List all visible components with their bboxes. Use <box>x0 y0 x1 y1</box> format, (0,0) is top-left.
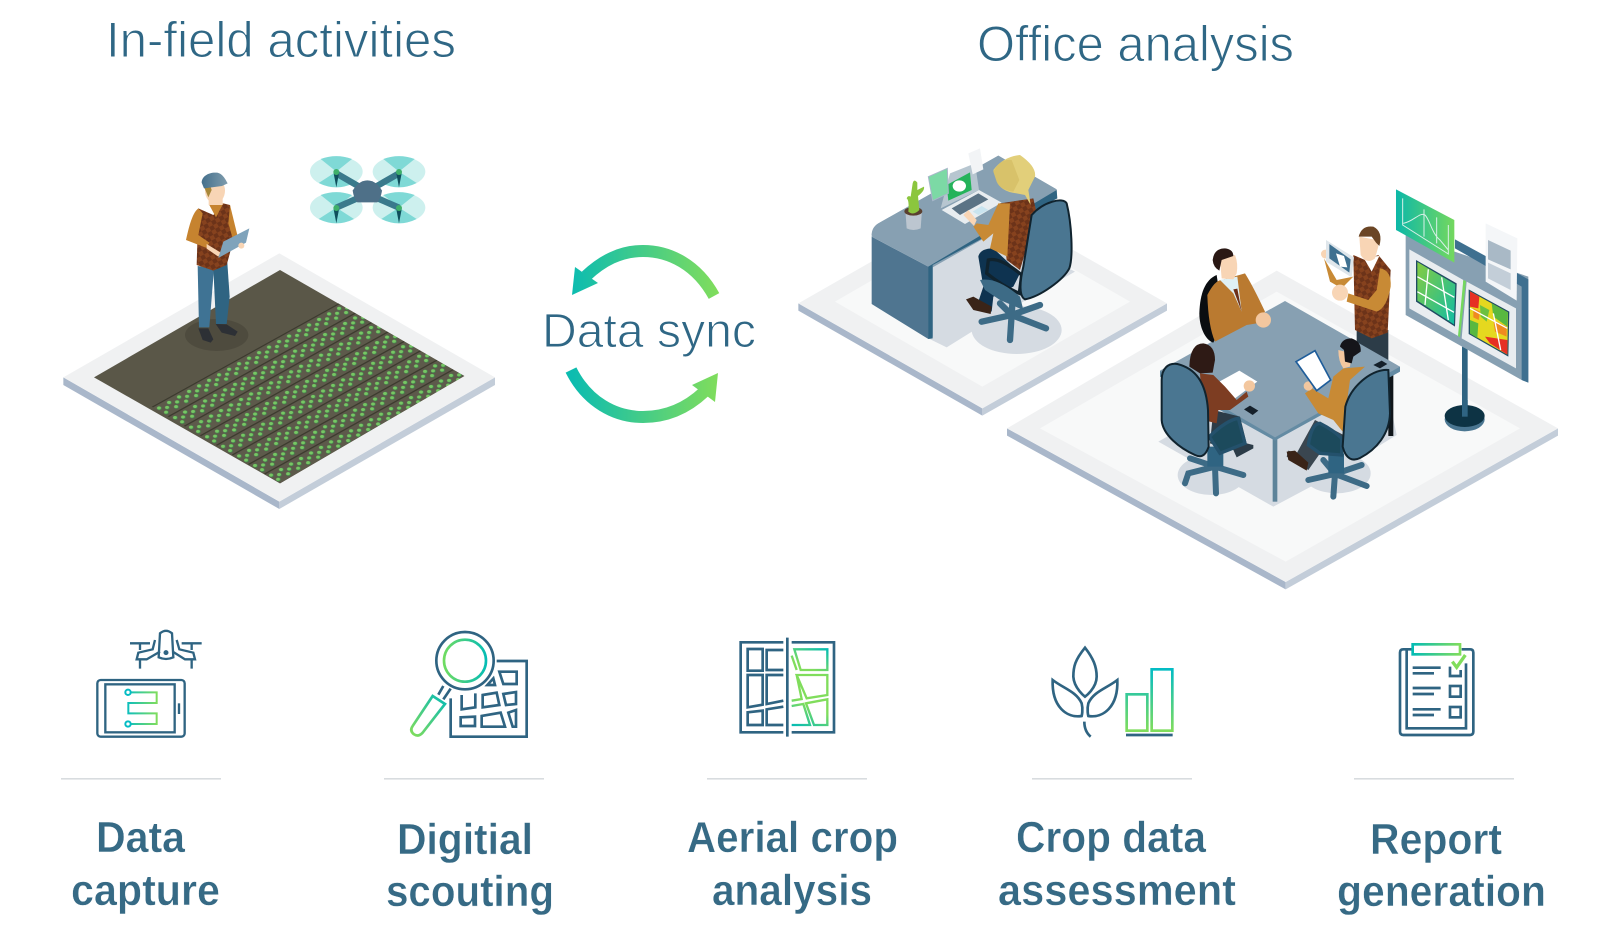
laptop with cloud sync <box>928 148 1002 224</box>
icon: report clipboard <box>1400 644 1473 735</box>
data sync arrows and label <box>542 251 756 417</box>
soil and crop rows <box>94 270 464 483</box>
divider and caption: Crop data assessment <box>998 778 1236 915</box>
bars <box>1126 669 1173 735</box>
quadcopter drone <box>310 156 425 223</box>
desk <box>872 156 1057 339</box>
standing presenter <box>1321 226 1393 436</box>
tablet flight path <box>125 690 157 727</box>
seated woman, left <box>1189 343 1255 457</box>
clip and check mark <box>1413 644 1465 667</box>
seated man, far side <box>1199 248 1271 343</box>
checklist lines <box>1413 667 1461 717</box>
drone outline <box>130 631 202 669</box>
icon: plant and bar chart <box>1053 648 1173 737</box>
map grid <box>451 661 527 737</box>
illustration: in-field scene <box>63 156 495 509</box>
divider and caption: Digitial scouting: scouting <box>386 867 554 916</box>
icon: magnifier over field map <box>411 632 527 737</box>
title: Office analysis: Office analysis <box>977 16 1294 72</box>
presentation board <box>1396 189 1528 431</box>
divider and caption: Crop data assessment: Crop data <box>1016 813 1206 862</box>
meeting platform <box>1007 271 1558 589</box>
rug and desk shadow <box>928 228 1075 354</box>
magnifier <box>411 632 494 736</box>
divider and caption: Report generation: Report <box>1370 815 1502 864</box>
field platform <box>63 253 495 509</box>
plant <box>1053 648 1117 737</box>
desk platform <box>798 198 1167 416</box>
divider and caption: Report generation: generation <box>1337 867 1546 916</box>
illustration: single desk office scene <box>798 148 1167 416</box>
divider and caption: Digitial scouting <box>384 778 554 916</box>
meeting table <box>1160 301 1400 502</box>
label: Data sync: Data sync <box>542 305 756 358</box>
analysed field overlay <box>792 649 827 725</box>
icon: drone and tablet <box>97 631 202 737</box>
divider and caption: Report generation <box>1337 778 1546 916</box>
title: In-field activities: In-field activities <box>106 12 456 68</box>
divider and caption: Digitial scouting: Digitial <box>397 815 533 864</box>
divider and caption: Data capture: capture <box>71 866 220 915</box>
chair, left <box>1162 364 1245 493</box>
illustration: meeting room scene <box>1007 189 1558 589</box>
arrow: bottom, field to office <box>571 370 718 417</box>
divider and caption: Aerial crop analysis: analysis <box>712 866 872 915</box>
cactus in pot <box>904 181 924 230</box>
office chair <box>980 200 1072 340</box>
divider and caption: Aerial crop analysis: Aerial crop <box>687 813 898 862</box>
arrow: top, office to field <box>572 251 714 296</box>
icon: split aerial map <box>741 638 834 737</box>
papers and phones on table <box>1219 361 1387 415</box>
farmer with tablet <box>185 173 249 351</box>
clipboard <box>1400 649 1473 735</box>
divider and caption: Aerial crop analysis <box>687 778 898 915</box>
divider and caption: Crop data assessment: assessment <box>998 866 1236 915</box>
seated man, right <box>1287 338 1365 471</box>
chair, right <box>1308 370 1390 497</box>
tablet outline <box>97 680 185 737</box>
floor shadow and rugs <box>1158 387 1397 507</box>
divider and caption: Data capture <box>61 778 221 915</box>
seated woman <box>963 155 1037 314</box>
divider and caption: Data capture: Data <box>96 813 185 862</box>
map base <box>741 638 834 737</box>
